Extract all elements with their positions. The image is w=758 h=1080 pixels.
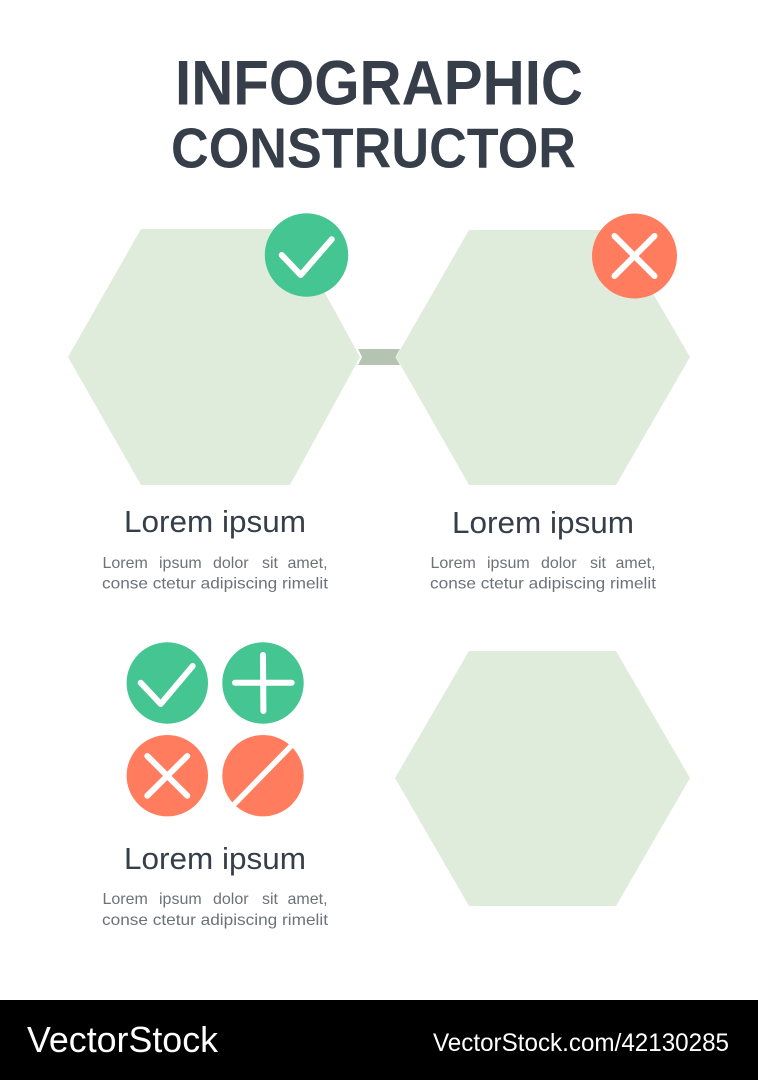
text block: bottom-left: amet, xyxy=(288,891,328,908)
text block: top-right: Lorem ipsum xyxy=(452,505,634,540)
text block: bottom-left xyxy=(102,841,329,929)
footer bar xyxy=(0,1000,758,1080)
text block: top-left: ipsum xyxy=(159,555,202,572)
text block: top-left xyxy=(102,504,329,592)
icon: check xyxy=(127,642,208,724)
text block: top-left: sit xyxy=(262,555,279,572)
icon group: four status badges xyxy=(127,642,304,816)
text block: top-right: conse ctetur adipiscing rimelit xyxy=(430,576,657,592)
title: CONSTRUCTOR xyxy=(171,116,576,180)
footer image id: VectorStock.com/42130285 xyxy=(433,1029,729,1057)
icon: plus xyxy=(222,642,304,724)
text block: bottom-left: dolor xyxy=(213,891,249,908)
text block: top-right: sit xyxy=(590,555,607,572)
text block: bottom-left: ipsum xyxy=(159,891,202,908)
text block: bottom-left: conse ctetur adipiscing rimelit xyxy=(102,912,329,929)
text block: top-left: amet, xyxy=(288,555,328,572)
footer logo text: VectorStock xyxy=(27,1019,219,1060)
text block: top-left: Lorem xyxy=(102,555,148,572)
title: INFOGRAPHIC xyxy=(175,48,583,118)
panel: top-right hexagon xyxy=(396,230,690,485)
panel: bottom-right hexagon xyxy=(395,651,690,906)
icon: slash xyxy=(222,735,304,816)
text block: top-right: amet, xyxy=(616,555,656,572)
text block: top-right: ipsum xyxy=(487,555,530,572)
panel: top-left hexagon xyxy=(68,229,360,485)
text block: top-right: dolor xyxy=(541,555,577,572)
text block: top-left: conse ctetur adipiscing rimelit xyxy=(102,576,329,592)
text block: bottom-left: Lorem ipsum xyxy=(124,841,306,876)
text block: top-right: Lorem xyxy=(430,555,476,572)
text block: bottom-left: sit xyxy=(262,891,279,908)
text block: top-left: dolor xyxy=(213,555,249,572)
icon: cross xyxy=(127,735,208,816)
text block: top-right xyxy=(430,505,657,592)
text block: top-left: Lorem ipsum xyxy=(124,504,306,539)
icon: large cross badge xyxy=(592,214,677,298)
icon: large check badge xyxy=(265,213,348,297)
text block: bottom-left: Lorem xyxy=(102,891,148,908)
title xyxy=(171,48,583,180)
connector between hexagons xyxy=(358,349,400,365)
